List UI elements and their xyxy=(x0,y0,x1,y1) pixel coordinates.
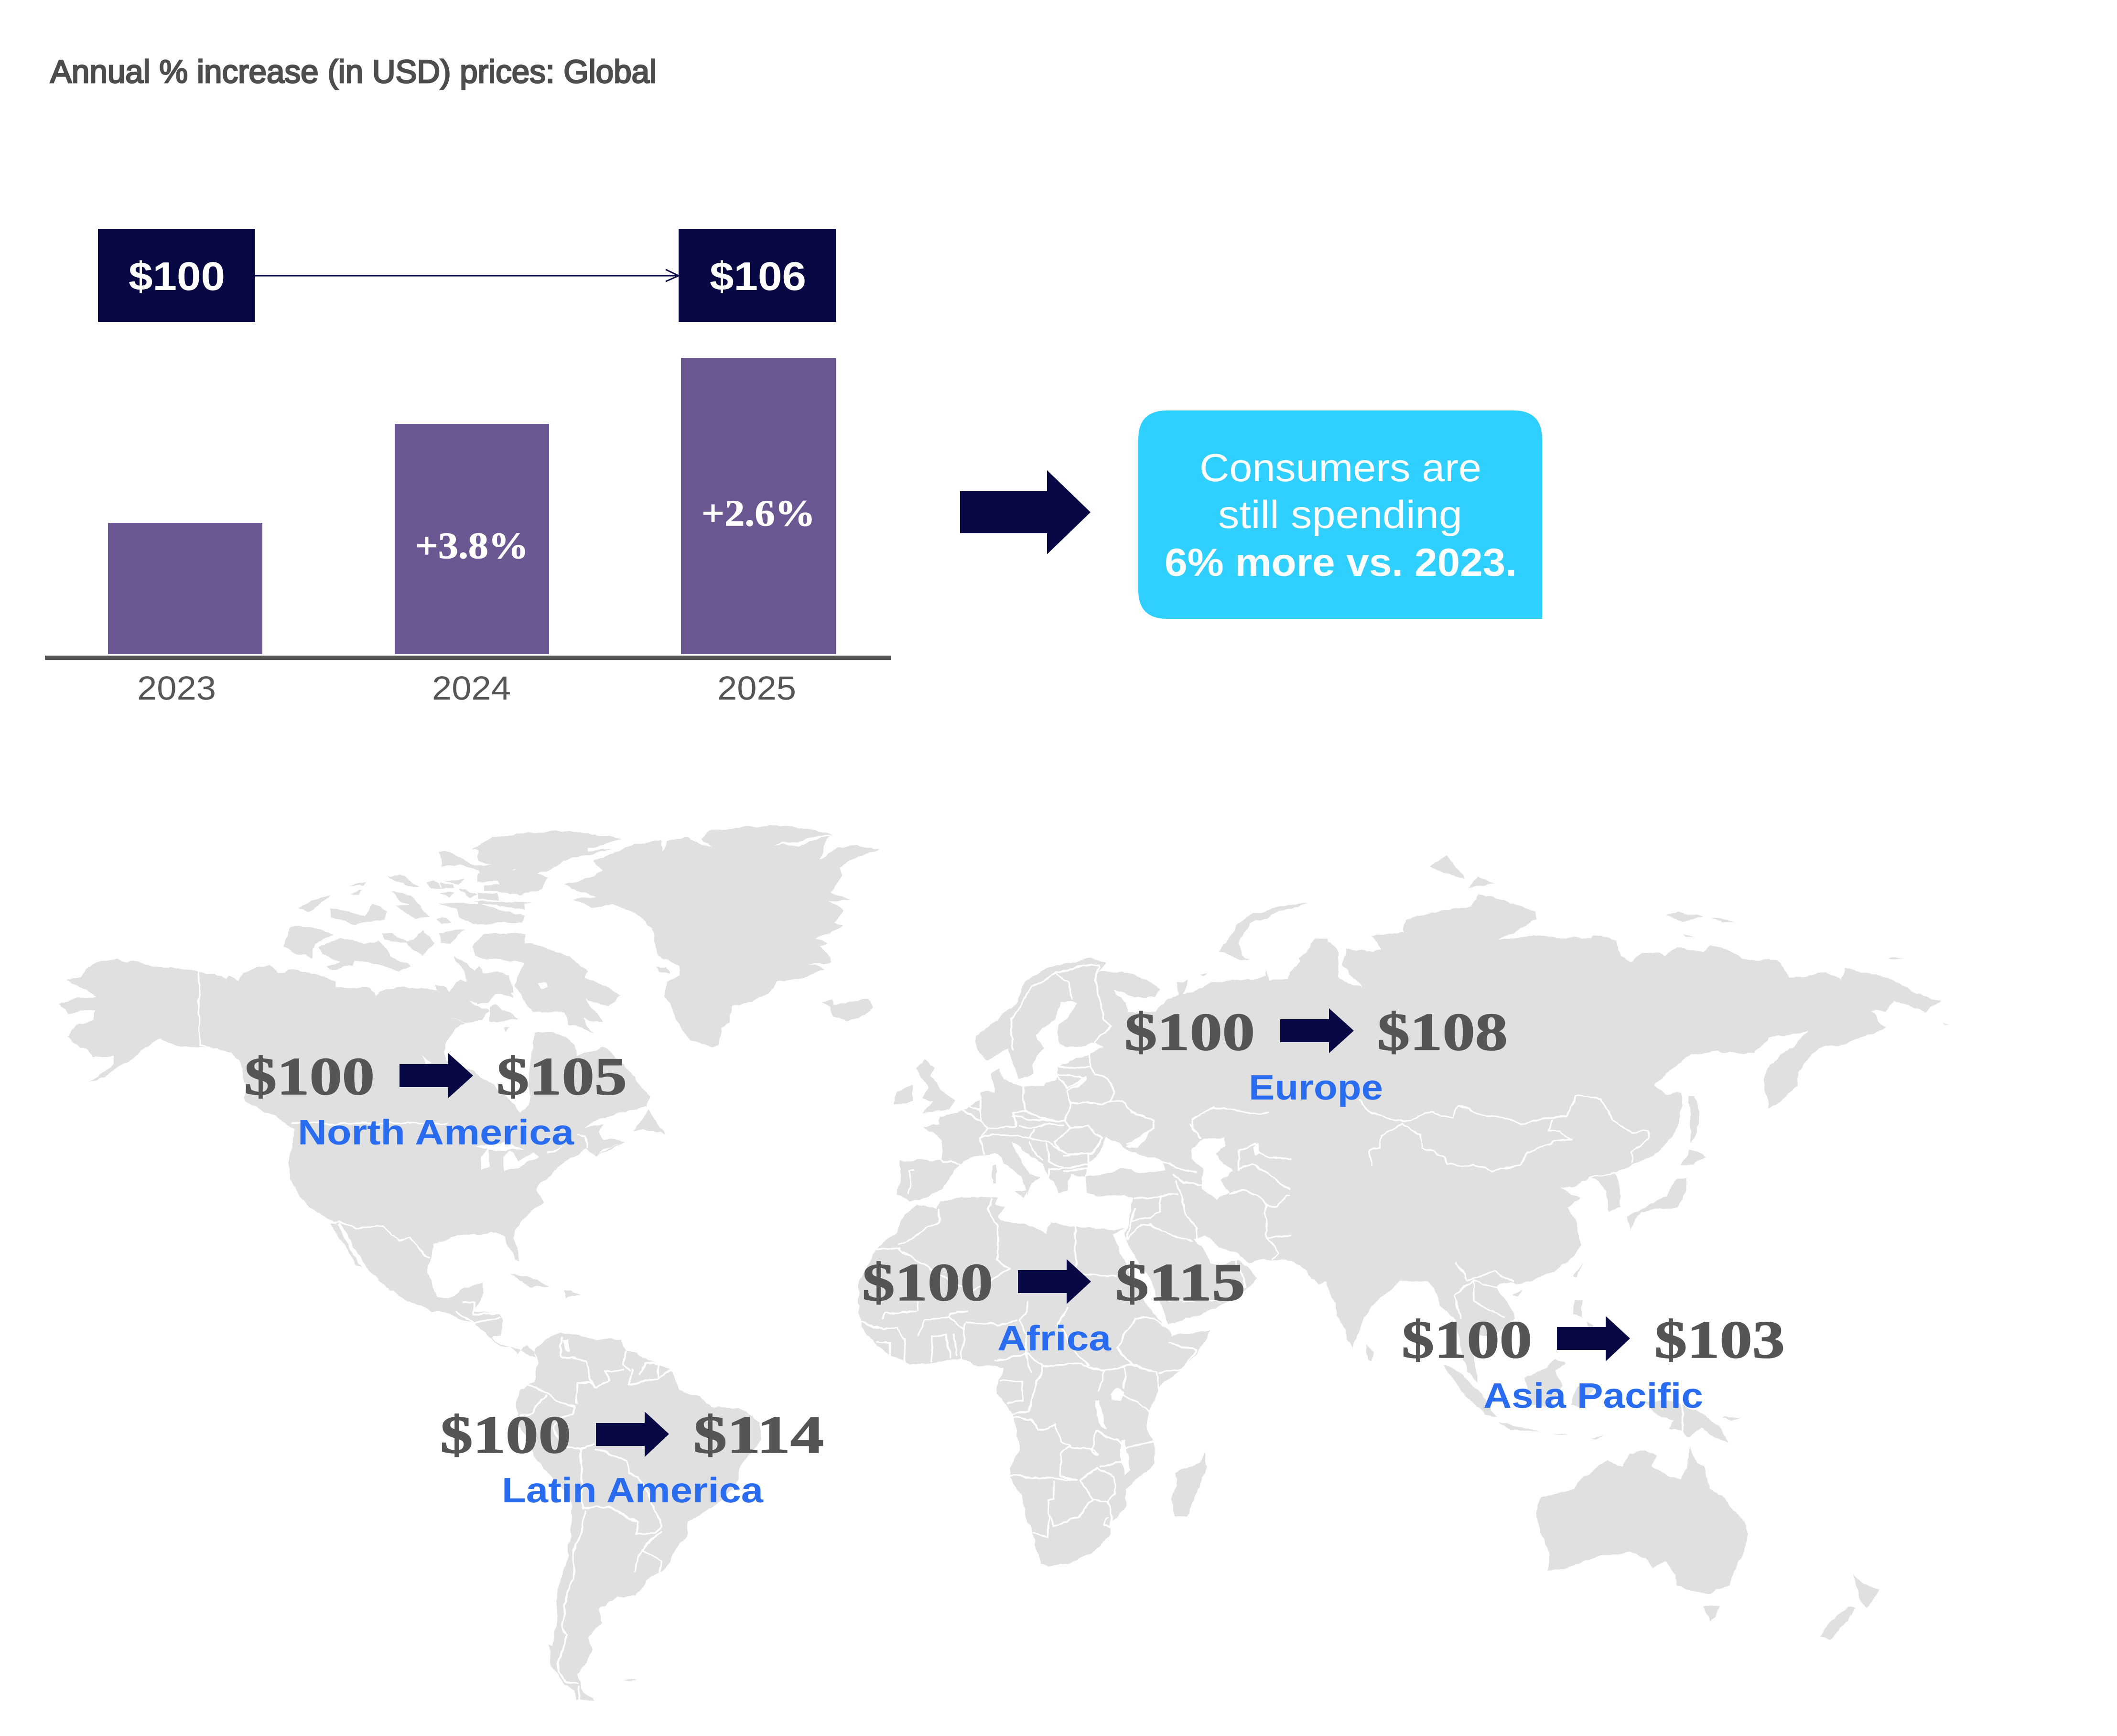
bar: 2023 xyxy=(108,523,262,654)
region: Europe xyxy=(1124,1003,1508,1107)
value: $100 North America: $100 xyxy=(244,1047,375,1106)
panel: global bar chart xyxy=(45,229,891,707)
map: Southeast Asia and Oceania xyxy=(1443,1292,1880,1640)
label: North America: North America xyxy=(298,1112,574,1152)
value: $114: $114 xyxy=(693,1405,824,1465)
arrow: Africa xyxy=(1018,1259,1091,1304)
price box: $100: $100 xyxy=(129,254,225,299)
bar value: +2.6%: +2.6% xyxy=(702,492,815,534)
map: Central and South America xyxy=(382,1266,760,1701)
South America borders xyxy=(457,1301,670,1701)
region: North America xyxy=(244,1047,627,1152)
arrow: chart to callout xyxy=(960,470,1091,554)
region: Latin America xyxy=(440,1405,824,1510)
arrow: $100 to $106 xyxy=(255,270,679,281)
arrow: Europe xyxy=(1280,1008,1354,1053)
map: landmasses xyxy=(58,825,1950,1701)
map: east Asia xyxy=(1290,855,1950,1382)
title: Annual % increase (in USD) prices: Global xyxy=(50,54,657,90)
value: $100 Asia Pacific: $100 xyxy=(1402,1310,1532,1369)
map: Africa xyxy=(858,1197,1211,1567)
arrow: Latin America xyxy=(596,1412,669,1457)
map: Europe and west Asia xyxy=(894,903,1338,1325)
map: North America xyxy=(58,837,650,1290)
year label: 2024: 2024 xyxy=(432,669,511,707)
east Asia borders xyxy=(1359,1097,1649,1318)
value: $108: $108 xyxy=(1377,1003,1508,1062)
arrow: Asia Pacific xyxy=(1557,1316,1630,1361)
callout: consumers spending: 6% more vs. 2023. xyxy=(1165,541,1517,584)
value: $115: $115 xyxy=(1115,1253,1245,1312)
callout: consumers spending xyxy=(1138,410,1542,619)
bar value: +3.8%: +3.8% xyxy=(415,525,529,566)
callout: consumers spending: Consumers are xyxy=(1199,446,1481,490)
arctic islands xyxy=(282,837,526,1023)
label: Africa: Africa xyxy=(997,1318,1112,1358)
US borders xyxy=(199,971,587,1258)
price box: $106: $106 xyxy=(710,254,806,299)
label: Europe: Europe xyxy=(1249,1067,1383,1107)
value: $105: $105 xyxy=(497,1047,627,1106)
region: Asia Pacific xyxy=(1402,1310,1785,1415)
region: Africa xyxy=(862,1253,1245,1358)
Europe borders xyxy=(907,965,1269,1192)
value: $100 Europe: $100 xyxy=(1124,1003,1255,1062)
world map xyxy=(58,825,1950,1701)
price box: $106 xyxy=(679,229,836,322)
value: $103: $103 xyxy=(1654,1310,1785,1369)
value: $100 Latin America: $100 xyxy=(440,1405,571,1465)
map: Greenland, Baffin and Iceland xyxy=(478,825,880,1155)
callout: consumers spending: still spending xyxy=(1218,493,1462,537)
bar: 2024 xyxy=(395,424,549,654)
chart axis xyxy=(45,656,891,660)
label: Latin America: Latin America xyxy=(502,1470,764,1510)
value: $100 Africa: $100 xyxy=(862,1253,993,1312)
price box: $100 xyxy=(98,229,255,322)
year label: 2023: 2023 xyxy=(137,669,216,707)
year label: 2025: 2025 xyxy=(717,669,796,707)
arrow: North America xyxy=(400,1053,473,1098)
Africa borders xyxy=(861,1198,1196,1537)
bar: 2025 xyxy=(681,358,836,654)
label: Asia Pacific: Asia Pacific xyxy=(1483,1376,1703,1415)
map: central and south Asia borders xyxy=(1127,1104,1469,1323)
